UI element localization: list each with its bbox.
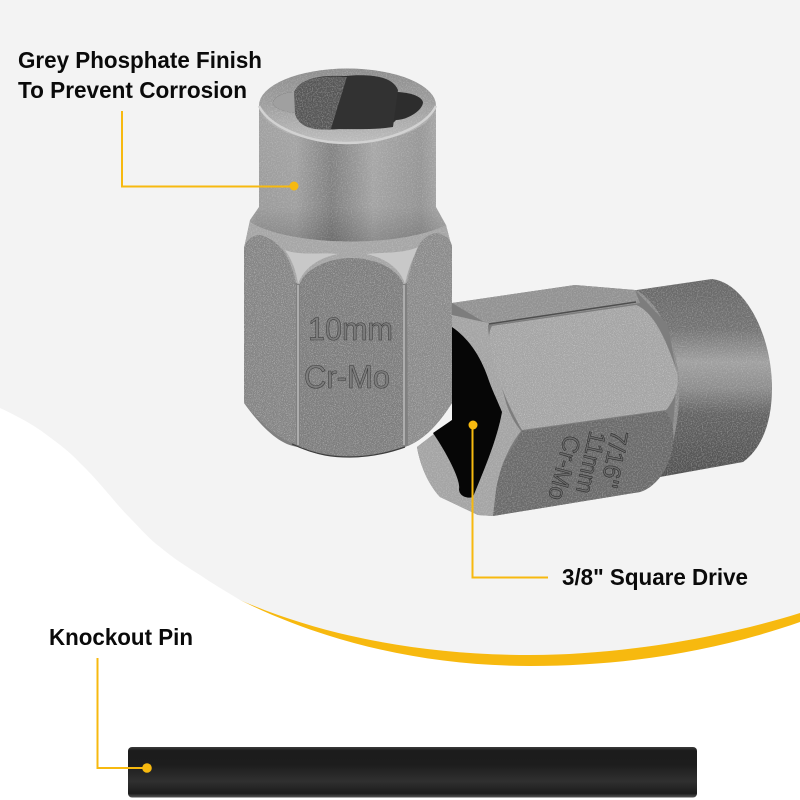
callout: knockout pin bbox=[49, 624, 193, 773]
chamfer between hex and cylinder bbox=[600, 290, 679, 492]
knockout pin bbox=[128, 747, 697, 798]
second socket, lying on its side bbox=[417, 279, 772, 516]
leader dot bbox=[290, 182, 298, 190]
cylinder lower shading bbox=[244, 130, 452, 248]
leader line bbox=[98, 658, 147, 768]
heading line two: To Prevent Corrosion bbox=[18, 77, 247, 103]
yellow swoosh bbox=[240, 600, 800, 666]
upper hex face bbox=[489, 305, 678, 430]
open end ring bbox=[417, 315, 521, 516]
stamped Cr-Mo: Cr-Mo bbox=[542, 432, 585, 503]
top rim bbox=[259, 68, 436, 142]
bright chamfer wedge right bbox=[366, 246, 420, 284]
stamped size 11mm: 11mm bbox=[570, 429, 610, 496]
hex edge line bbox=[489, 302, 636, 324]
cylinder end of second socket bbox=[630, 279, 772, 477]
leader line bbox=[122, 111, 294, 186]
bottom edge bbox=[292, 444, 405, 457]
leader dot bbox=[142, 763, 152, 773]
rim highlight bbox=[259, 106, 436, 143]
first helical flute bbox=[294, 76, 347, 130]
stamped size 7/16: 7/16" bbox=[595, 428, 633, 490]
callout: square drive bbox=[468, 420, 748, 590]
second helical flute bbox=[331, 76, 398, 129]
right hex face bbox=[407, 233, 452, 446]
stamped text on second socket bbox=[542, 428, 633, 503]
hex edge highlights bbox=[298, 285, 404, 445]
top hex face bbox=[452, 285, 640, 325]
centre hex face bbox=[300, 258, 403, 456]
stamped text 10mm: 10mm bbox=[308, 311, 393, 347]
front socket, standing upright bbox=[244, 68, 452, 457]
left flute lobe bbox=[273, 92, 295, 113]
chamfer between cylinder and hex bbox=[244, 222, 452, 300]
leader dot bbox=[468, 420, 478, 430]
bright chamfer wedge left bbox=[285, 250, 338, 284]
black square drive opening bbox=[433, 327, 502, 498]
hex body of second socket bbox=[417, 285, 677, 516]
lower hex face bbox=[492, 411, 673, 516]
callout: grey phosphate finish bbox=[18, 47, 298, 190]
label: Knockout Pin bbox=[49, 624, 193, 650]
hex body base bbox=[244, 248, 452, 457]
stamped text Cr-Mo: Cr-Mo bbox=[304, 359, 390, 395]
left hex face bbox=[244, 235, 296, 444]
extractor opening bbox=[273, 75, 423, 130]
heading line one: Grey Phosphate Finish bbox=[18, 47, 262, 73]
label: 3/8" Square Drive bbox=[562, 564, 748, 590]
cylinder body bbox=[244, 105, 452, 248]
leader line bbox=[472, 425, 548, 578]
